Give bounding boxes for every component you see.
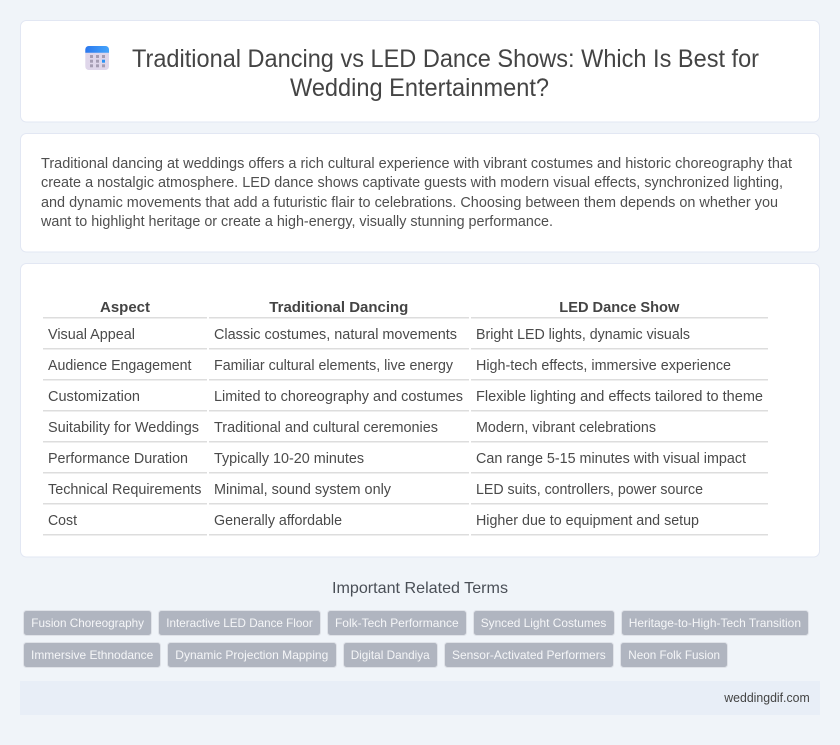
table row: suitability for weddings: Modern, vibrant celebrations <box>476 420 656 436</box>
table row: visual appeal: Classic costumes, natural movements <box>214 327 457 343</box>
text block: introduction paragraph: want to highlight heritage or create a high-energy, visually stunning performance. <box>40 214 553 230</box>
table row: customization: Flexible lighting and effects tailored to theme <box>476 389 763 405</box>
footer source text: weddingdif.com <box>723 691 810 705</box>
title <box>132 45 759 102</box>
table row: suitability for weddings <box>43 420 768 442</box>
table row: visual appeal: Bright LED lights, dynamic visuals <box>476 327 690 343</box>
title: Wedding Entertainment? <box>290 74 549 102</box>
tag: interactive LED dance floor: Interactive LED Dance Floor <box>166 616 313 630</box>
table row: performance duration: Typically 10-20 minutes <box>214 451 364 467</box>
table row: suitability for weddings: Suitability for Weddings <box>48 420 199 436</box>
tag: digital dandiya: Digital Dandiya <box>351 648 430 662</box>
tag: immersive ethnodance <box>24 642 160 668</box>
tag: synced light costumes: Synced Light Costumes <box>481 616 606 630</box>
table header row <box>43 300 768 318</box>
tag: fusion choreography <box>24 610 152 636</box>
table row: performance duration: Can range 5-15 minutes with visual impact <box>476 451 746 467</box>
tag: immersive ethnodance: Immersive Ethnodance <box>31 648 154 662</box>
text block: introduction paragraph: and dynamic movements that add a futuristic flair to celebrations. Choosing between them depends on whether you <box>41 195 778 211</box>
tag: sensor-activated performers <box>444 642 614 668</box>
table row: technical requirements: Technical Requirements <box>48 482 202 498</box>
table row: customization: Customization <box>48 389 140 405</box>
table row: audience engagement: High-tech effects, immersive experience <box>476 358 731 374</box>
table row: visual appeal: Visual Appeal <box>48 327 135 343</box>
table header row: Aspect <box>100 300 150 316</box>
text block: introduction paragraph: create a nostalgic atmosphere. LED dance shows captivate guests with modern visual effects, synchronized lighting, <box>41 175 783 191</box>
table row: audience engagement <box>43 358 768 380</box>
title: Traditional Dancing vs LED Dance Shows: Which Is Best for <box>132 45 759 73</box>
tag: fusion choreography: Fusion Choreography <box>31 616 144 630</box>
table row: cost: Generally affordable <box>214 513 342 529</box>
table row: technical requirements <box>43 482 768 504</box>
tag: heritage-to-high-tech transition <box>622 610 808 636</box>
table row: cost <box>43 513 768 536</box>
tag: synced light costumes <box>474 610 614 636</box>
table row: cost: Higher due to equipment and setup <box>476 513 699 529</box>
tag: folk-tech performance: Folk-Tech Performance <box>335 616 459 630</box>
tag: dynamic projection mapping: Dynamic Projection Mapping <box>175 648 328 662</box>
tag: sensor-activated performers: Sensor-Activated Performers <box>452 648 606 662</box>
table row: audience engagement: Familiar cultural elements, live energy <box>214 358 454 374</box>
table row: performance duration <box>43 451 768 474</box>
table row: audience engagement: Audience Engagement <box>48 358 192 374</box>
text block: introduction paragraph <box>40 156 792 230</box>
footer bar <box>20 681 820 715</box>
table row: cost: Cost <box>48 513 77 529</box>
tag: dynamic projection mapping <box>168 642 336 668</box>
table row: technical requirements: LED suits, controllers, power source <box>476 482 703 498</box>
table row: visual appeal <box>43 327 768 350</box>
panel: title card <box>20 20 820 122</box>
icon: calendar <box>85 46 109 70</box>
heading: important related terms: Important Related Terms <box>332 580 508 597</box>
table header row: Traditional Dancing <box>269 300 408 316</box>
table header row: LED Dance Show <box>559 300 680 316</box>
tag: folk-tech performance <box>328 610 466 636</box>
text block: introduction paragraph: Traditional dancing at weddings offers a rich cultural experience with vibrant costumes and historic choreography that <box>41 156 792 172</box>
tag: interactive LED dance floor <box>158 610 320 636</box>
related term tags <box>24 610 808 668</box>
table row: suitability for weddings: Traditional and cultural ceremonies <box>214 420 438 436</box>
table row: customization: Limited to choreography and costumes <box>214 389 463 405</box>
tag: digital dandiya <box>344 642 438 668</box>
panel: comparison table <box>20 264 820 557</box>
tag: neon folk fusion <box>620 642 728 668</box>
panel: introduction <box>20 134 820 252</box>
table row: technical requirements: Minimal, sound system only <box>214 482 392 498</box>
tag: heritage-to-high-tech transition: Heritage-to-High-Tech Transition <box>629 616 801 630</box>
tag: neon folk fusion: Neon Folk Fusion <box>628 648 720 662</box>
table row: performance duration: Performance Duration <box>48 451 188 467</box>
table row: customization <box>43 389 768 412</box>
